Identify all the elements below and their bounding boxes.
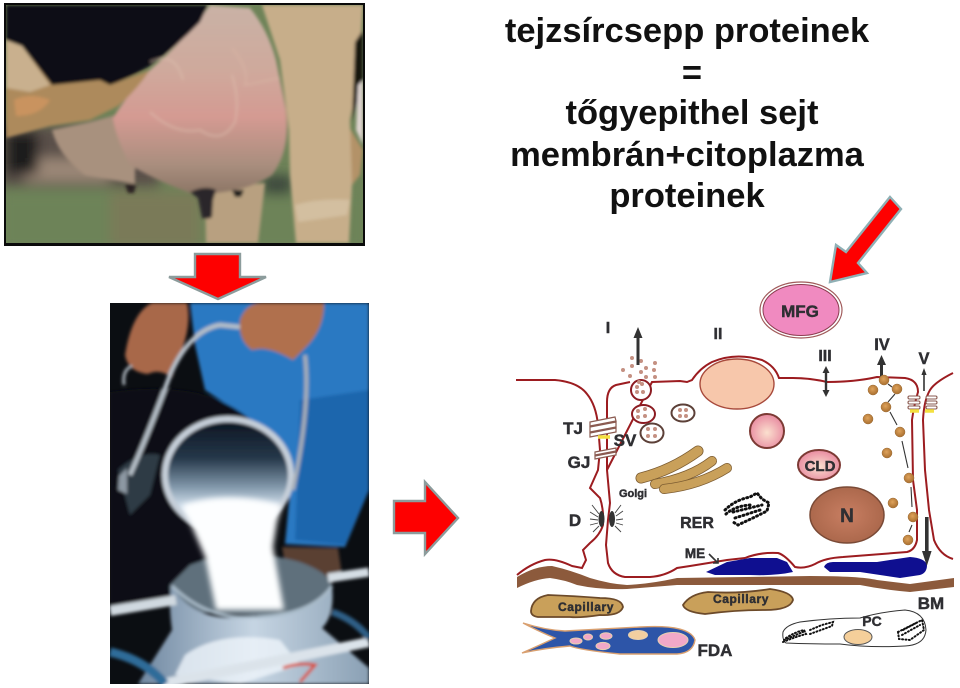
diagram labels: SV [614, 431, 637, 450]
myoepithelial cell [706, 558, 793, 575]
diagram labels: I [606, 320, 610, 337]
Golgi apparatus [641, 451, 727, 489]
cell diagram [516, 282, 954, 660]
rough endoplasmic reticulum [725, 493, 769, 525]
diagram labels: Golgi [619, 488, 647, 500]
small lipid droplet [750, 414, 784, 448]
capillary left [531, 595, 623, 617]
title: proteinek [609, 177, 765, 215]
nucleus: N [840, 506, 854, 527]
tight junction TJ left [590, 417, 616, 459]
FDA cell [522, 623, 695, 654]
arrow: right towards cell diagram [394, 482, 458, 554]
MFG milk fat globule [760, 282, 842, 338]
capillary right: Capillary [713, 592, 769, 606]
main cell membrane [606, 356, 918, 577]
capillary left: Capillary [558, 600, 614, 614]
diagram labels: III [818, 348, 832, 365]
diagram labels: RER [680, 515, 714, 532]
diagram labels: BM [918, 594, 944, 613]
transport arrows [634, 327, 932, 566]
CLD droplet [798, 450, 840, 480]
secretory vesicles [631, 380, 694, 442]
PC plasma cell [783, 610, 926, 647]
ME pointer [709, 554, 718, 563]
CLD droplet: CLD [805, 458, 836, 475]
tight junction TJ right [908, 396, 937, 409]
diagram labels: V [918, 350, 930, 368]
PC plasma cell: PC [862, 613, 882, 629]
diagram labels: FDA [698, 641, 732, 660]
basement membrane [517, 566, 954, 592]
lipid droplet being secreted [700, 359, 774, 409]
granule trajectory [888, 384, 912, 532]
MFG milk fat globule: MFG [781, 302, 819, 321]
cytoplasmic granules [863, 375, 918, 545]
gap junction yellow [598, 435, 610, 439]
diagram labels: TJ [563, 419, 583, 438]
left cell membrane [516, 380, 603, 575]
diagram labels: II [714, 326, 722, 343]
right cell membrane [923, 373, 953, 559]
vesicle casein dots [621, 356, 688, 438]
title: = [682, 54, 702, 92]
desmosome [590, 505, 623, 532]
arrow: down from udder photo [169, 254, 266, 299]
title [505, 12, 870, 215]
title: membrán+citoplazma [510, 136, 865, 174]
diagram labels: GJ [568, 453, 590, 472]
photo: milk pouring into can [110, 303, 369, 684]
diagram labels: D [569, 511, 581, 530]
photo: cow udder [0, 3, 370, 252]
diagram labels [563, 320, 944, 660]
diagram labels: ME [685, 546, 705, 561]
title: tőgyepithel sejt [565, 94, 819, 132]
title: tejzsírcsepp proteinek [505, 12, 870, 50]
capillary right [683, 589, 793, 614]
nucleus [810, 487, 884, 543]
diagram labels: IV [874, 336, 890, 354]
arrow: diagonal towards MFG [830, 197, 901, 282]
